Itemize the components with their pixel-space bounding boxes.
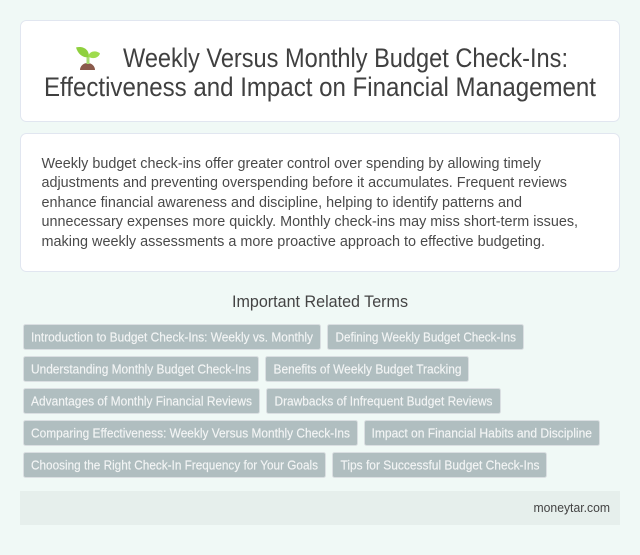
tag bbox=[266, 356, 468, 382]
panel: summary card bbox=[20, 134, 620, 272]
tag: Introduction to Budget Check-Ins: Weekly vs. Monthly bbox=[31, 330, 313, 344]
tag: Drawbacks of Infrequent Budget Reviews bbox=[274, 394, 493, 408]
summary text: enhance financial awareness and discipline, helping to identify patterns and bbox=[42, 194, 522, 211]
tag bbox=[266, 388, 500, 414]
tag: Choosing the Right Check-In Frequency for Your Goals bbox=[31, 458, 318, 472]
tag: Benefits of Weekly Budget Tracking bbox=[274, 362, 462, 376]
summary text: Weekly budget check-ins offer greater control over spending by allowing timely bbox=[42, 155, 541, 172]
summary text: unnecessary expenses more quickly. Monthly check-ins may miss short-term issues, bbox=[42, 213, 578, 230]
tag: Understanding Monthly Budget Check-Ins bbox=[31, 362, 251, 376]
title: Weekly Versus Monthly Budget Check-Ins: bbox=[123, 43, 568, 73]
tag: Impact on Financial Habits and Discipline bbox=[372, 426, 592, 440]
tag: Comparing Effectiveness: Weekly Versus Monthly Check-Ins bbox=[31, 426, 350, 440]
summary text: adjustments and preventing overspending before it accumulates. Frequent reviews bbox=[42, 174, 567, 191]
tag bbox=[332, 452, 546, 478]
tag: Advantages of Monthly Financial Reviews bbox=[31, 394, 252, 408]
tag: Defining Weekly Budget Check-Ins bbox=[336, 330, 516, 344]
tag bbox=[24, 452, 326, 478]
tag: Tips for Successful Budget Check-Ins bbox=[340, 458, 540, 472]
panel: title card bbox=[20, 20, 620, 122]
title bbox=[44, 43, 596, 102]
summary text: making weekly assessments a more proactive approach to effective budgeting. bbox=[42, 233, 545, 250]
tag bbox=[24, 356, 258, 382]
tag bbox=[24, 388, 260, 414]
footer source: moneytar.com bbox=[534, 501, 610, 515]
panel: related term tags bbox=[24, 324, 600, 478]
tag bbox=[364, 420, 600, 446]
heading: related terms: Important Related Terms bbox=[232, 293, 408, 311]
footer bbox=[20, 491, 620, 525]
icon: seedling bbox=[76, 47, 100, 70]
tag bbox=[328, 324, 524, 350]
tag bbox=[24, 324, 320, 350]
tag bbox=[24, 420, 358, 446]
summary text bbox=[42, 155, 578, 250]
